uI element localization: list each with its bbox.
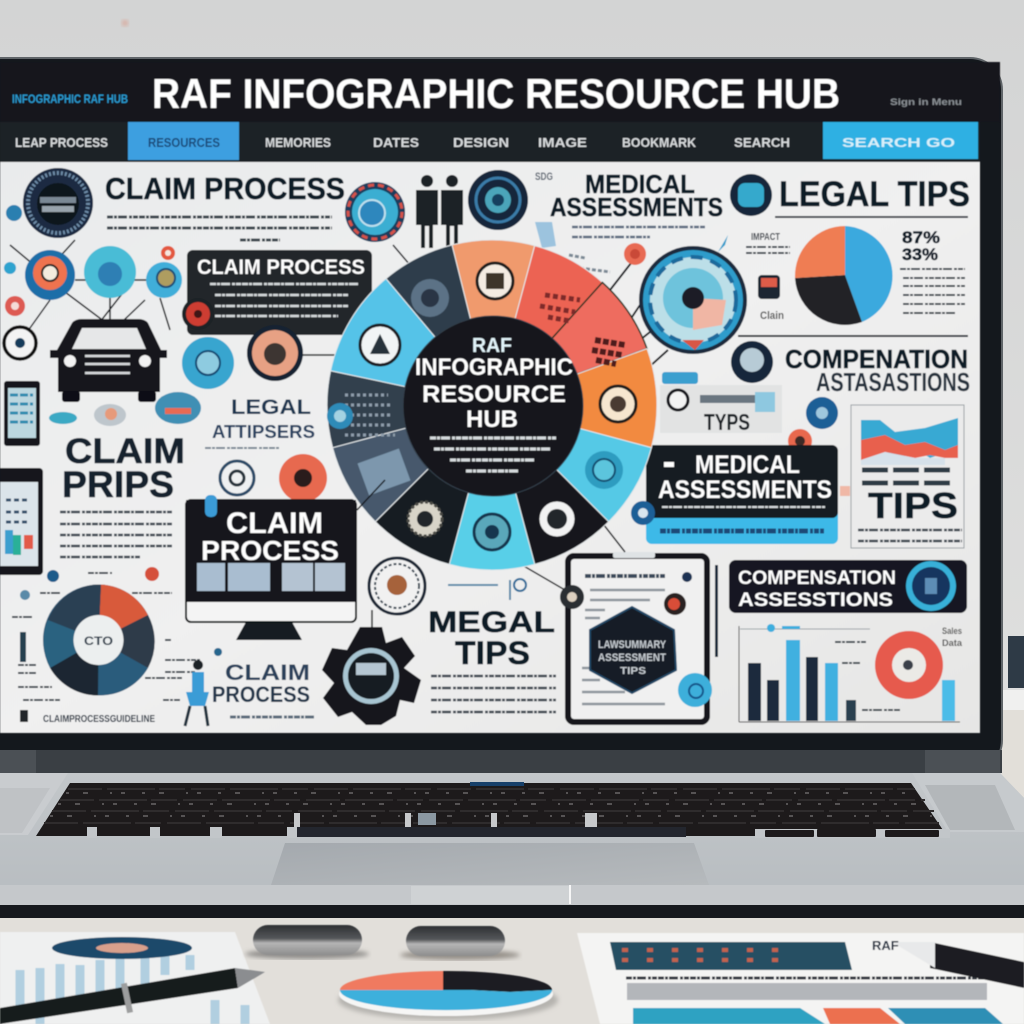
- navigation bar: IMAGE: [538, 135, 587, 150]
- donut annotations: CLAIMPROCESSGUIDELINE: [43, 714, 155, 725]
- hub title: [415, 335, 573, 433]
- screen page: [0, 162, 980, 733]
- dark callout: compensation assessments: COMPENSATION: [738, 568, 896, 589]
- icon: dark oval badge: [731, 341, 773, 383]
- segment icons: [327, 263, 636, 550]
- icon: orange badge: [247, 325, 340, 381]
- icon: dark ring badge: [468, 170, 528, 230]
- medical text lines: [572, 227, 705, 237]
- heading: claim tips: [62, 432, 185, 505]
- clipboard: [568, 552, 712, 722]
- pie figures: [902, 230, 940, 261]
- heading: claim tips: CLAIM: [65, 432, 185, 471]
- monitor: [186, 495, 356, 640]
- icon: cyan face badge: [730, 174, 772, 216]
- header controls: Sign in Menu: [890, 97, 962, 107]
- claim process text lines: [107, 217, 332, 240]
- pen left: [0, 968, 265, 1024]
- icon: red badge: [181, 301, 211, 327]
- heading: medical assessments: [550, 174, 723, 218]
- icon: blue badge: [806, 397, 838, 429]
- icon: red tag: [788, 428, 812, 446]
- clipboard: TIPS: [620, 666, 646, 677]
- base front edge: [0, 905, 1024, 918]
- icon network: connected circles: [4, 240, 182, 359]
- navigation bar: DESIGN: [453, 135, 509, 150]
- clipboard: LAWSUMMARY: [598, 639, 667, 651]
- pie figures: 87%: [902, 228, 940, 247]
- heading: megal tips: MEGAL: [428, 606, 555, 639]
- heading: compensation: ASTASASTIONS: [816, 367, 970, 397]
- search tab: [823, 122, 978, 159]
- hub text lines: [430, 438, 556, 471]
- heading: legal attorneys: [212, 396, 315, 442]
- navigation bar: BOOKMARK: [622, 135, 697, 150]
- dark callout: medical assessments: [646, 445, 838, 544]
- heading: compensation: COMPENATION: [785, 344, 968, 374]
- claim tips text lines: [60, 512, 172, 557]
- donut annotations: [12, 567, 200, 725]
- heading: compensation: [785, 348, 970, 392]
- legal tips side labels: Clain: [760, 310, 784, 322]
- hub title: INFOGRAPHIC: [415, 354, 573, 381]
- document heading line: [626, 976, 985, 980]
- icon: connector badge: [631, 501, 655, 525]
- rule under legal tips: [775, 216, 968, 218]
- icon: cyan badge: [182, 337, 234, 389]
- bar chart: [739, 624, 963, 722]
- dark callout: claim process: CLAIM PROCESS: [197, 256, 365, 279]
- hub title: RAF: [472, 335, 512, 357]
- icon: clipboard connector: [522, 520, 625, 609]
- gauge: [639, 235, 747, 354]
- title: RAF INFOGRAPHIC RESOURCE HUB: [152, 70, 840, 117]
- heading: claim process lower: CLAIM: [225, 660, 310, 685]
- navigation bar: SEARCH: [734, 135, 790, 150]
- metal stone right: [400, 926, 520, 960]
- trackpad notch: [411, 886, 571, 904]
- navigation bar: SEARCH GO: [842, 135, 955, 150]
- donut chart: [43, 584, 155, 696]
- heading: legal tips: LEGAL TIPS: [779, 175, 970, 214]
- dark callout: compensation assessments: ASSESSTIONS: [738, 590, 893, 611]
- navigation bar: DATES: [373, 135, 419, 150]
- center hub circle: [403, 316, 583, 496]
- icon: red-blue seal: [345, 182, 410, 265]
- hub title: RESOURCE: [422, 381, 566, 408]
- legal tips side labels: IMPACT: [751, 232, 780, 243]
- speaker grille right: [925, 785, 1015, 830]
- dark callout: claim process: [187, 250, 372, 335]
- navigation bar: RESOURCES: [148, 135, 220, 150]
- wheel segments: [386, 245, 471, 338]
- bar chart: Data: [942, 638, 963, 648]
- left document ellipse graphic: [52, 937, 192, 959]
- navigation bar: LEAP PROCESS: [15, 135, 108, 150]
- dark callout: compensation assessments: [729, 560, 967, 613]
- icon: red seal: [279, 454, 327, 502]
- speaker grille left: [0, 788, 50, 833]
- central wheel: [327, 240, 657, 570]
- heading: claim tips: PRIPS: [62, 464, 174, 505]
- phone: large: [0, 468, 43, 575]
- laptop lid bezel: [0, 58, 1002, 773]
- small faint label near badge: SDG: [535, 171, 553, 183]
- heading: legal attorneys: LEGAL: [231, 396, 311, 419]
- icon: large top-left ring: [6, 168, 93, 238]
- pin and pointer: [609, 242, 669, 366]
- salmon connector dot: [840, 486, 850, 496]
- heading: megal tips: [428, 606, 555, 671]
- phone: small: [4, 381, 40, 446]
- navigation bar: [0, 122, 980, 162]
- small cluster of illustrated icons: [49, 392, 201, 426]
- right document: [577, 933, 1024, 1024]
- monitor: PROCESS: [201, 535, 339, 566]
- rule above compensation: [738, 335, 968, 337]
- pie chart: [795, 226, 893, 325]
- document gray text block: [627, 983, 987, 1000]
- desk disk chart: [338, 971, 558, 1020]
- heading: claim process lower: [212, 660, 316, 717]
- donut chart: CTO: [84, 634, 113, 648]
- header logo text: INFOGRAPHIC RAF HUB: [12, 92, 128, 106]
- bar chart: Sales: [942, 626, 962, 636]
- laptop base with keyboard and trackpad: [0, 773, 1024, 905]
- heading: claim process lower: PROCESS: [212, 682, 310, 707]
- right document: RAF: [872, 938, 899, 953]
- desk surface: [0, 918, 1024, 1024]
- hexagon badge: [590, 607, 676, 693]
- legal tips side labels: [746, 232, 790, 322]
- heading: claim process: CLAIM PROCESS: [105, 171, 345, 206]
- active tab: [128, 122, 239, 160]
- small tips card: TYPS: [704, 409, 750, 435]
- icon: car: [50, 319, 167, 402]
- icon: two people: [416, 175, 463, 252]
- tips chart panel: TIPS: [868, 485, 958, 526]
- small ornament near medallion: [448, 579, 526, 600]
- navigation bar: MEMORIES: [265, 135, 331, 150]
- small medical sketches: [535, 222, 610, 272]
- heading: legal attorneys: ATTIPSERS: [212, 422, 315, 442]
- vertical pen: [715, 565, 718, 657]
- small tips card: [660, 372, 782, 435]
- document image strip: [610, 942, 852, 970]
- hub title: HUB: [466, 406, 518, 433]
- left document with pen: [0, 932, 270, 1024]
- document color bands: [633, 1008, 1003, 1024]
- tips chart panel: [851, 405, 964, 548]
- red donut ring: [875, 631, 943, 699]
- heading: medical assessments: MEDICAL: [585, 169, 695, 199]
- dark callout: medical assessments: MEDICAL: [695, 451, 800, 479]
- seal medallion: [357, 480, 425, 640]
- keyboard bottom row gaps: [87, 827, 97, 838]
- gear: [322, 627, 421, 725]
- pie figures: 33%: [902, 245, 938, 264]
- legal text line: [205, 447, 280, 449]
- monitor: CLAIM: [226, 507, 323, 540]
- trackpad: [271, 843, 709, 885]
- heading: megal tips: TIPS: [455, 635, 530, 671]
- pie text lines: [900, 269, 965, 313]
- clipboard: ASSESSMENT: [598, 652, 666, 664]
- figure: person: [185, 648, 222, 726]
- megal text lines: [431, 676, 556, 712]
- metal stone left: [245, 925, 369, 959]
- keyboard: [36, 782, 950, 838]
- screen content: [0, 62, 1000, 733]
- dark callout: medical assessments: ASSESSMENTS: [658, 476, 832, 504]
- header bar: [0, 62, 1000, 122]
- heading: medical assessments: ASSESSMENTS: [550, 192, 723, 222]
- icon: outlined ring: [220, 461, 254, 495]
- pen right: [892, 942, 1024, 988]
